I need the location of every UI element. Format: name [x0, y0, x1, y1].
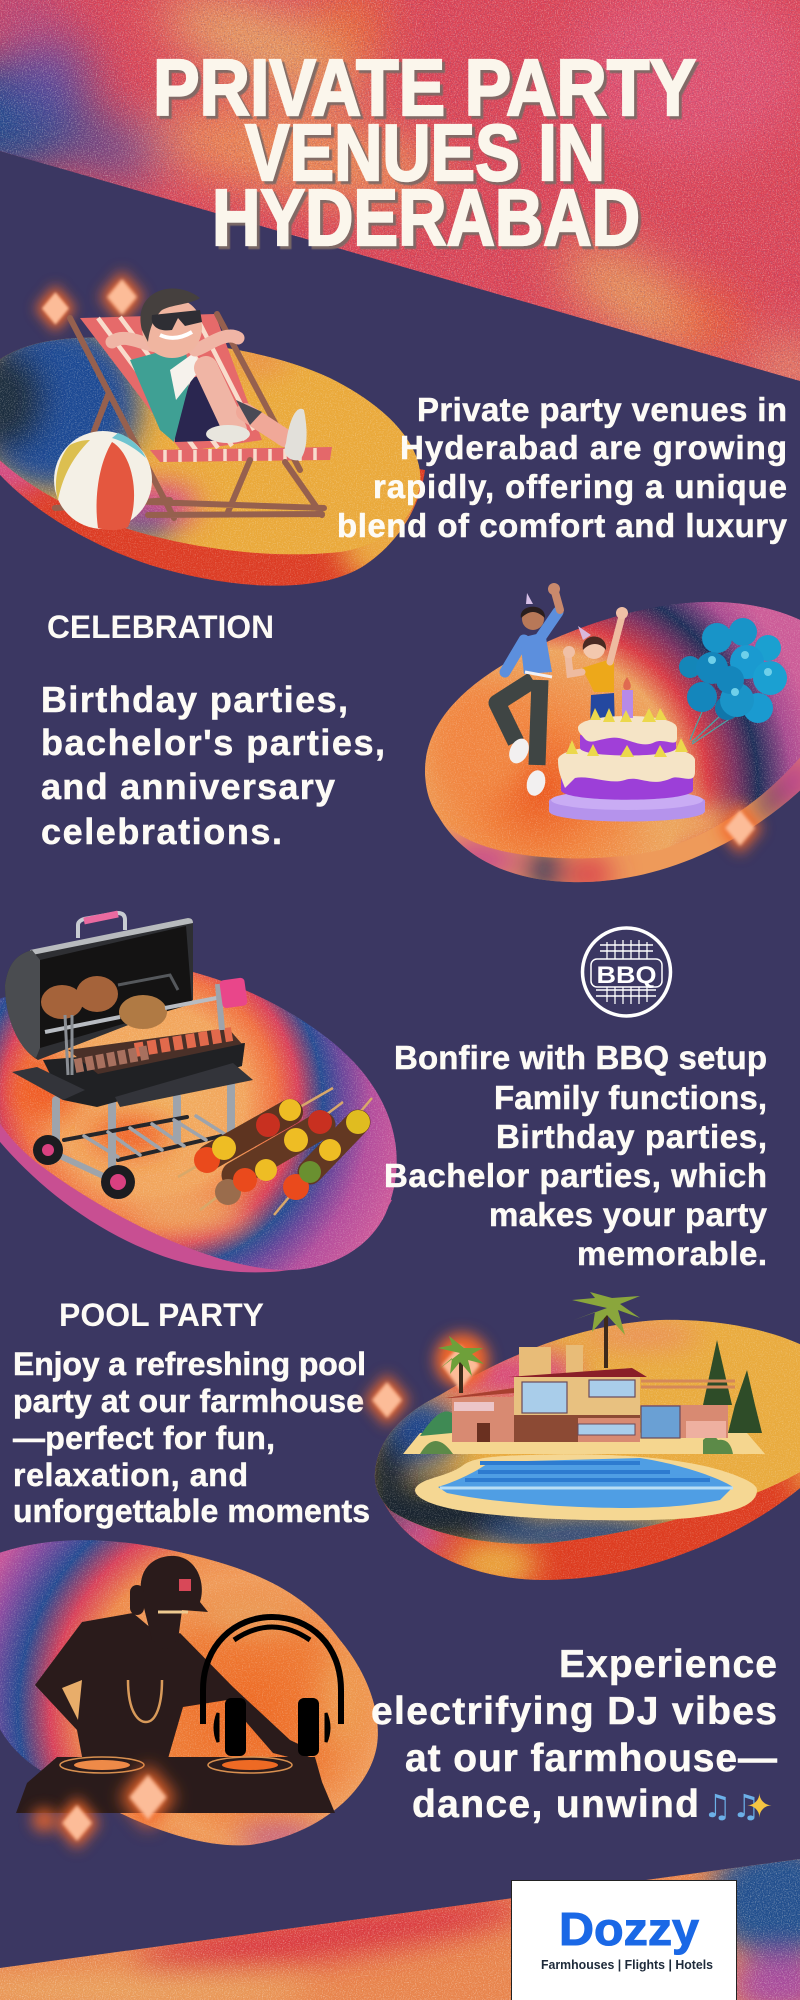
birthday cake	[549, 677, 705, 822]
glow diamonds	[32, 1765, 176, 1849]
rotisserie motor	[218, 977, 248, 1030]
pool party text: relaxation, and	[13, 1457, 248, 1493]
charcoal grill	[5, 913, 253, 1199]
grill handle	[78, 913, 125, 938]
trees	[703, 1340, 762, 1433]
deck chair	[55, 314, 332, 518]
intro text: Private party venues in	[417, 391, 787, 428]
intro text: Hyderabad are growing	[400, 429, 787, 466]
intro text	[337, 391, 788, 544]
title: HYDERABAD	[212, 173, 640, 262]
panel: bbq illustration	[0, 913, 420, 1280]
sand deck	[403, 1433, 765, 1454]
villa	[445, 1345, 735, 1442]
pool	[415, 1454, 757, 1520]
panel: cake illustration	[420, 583, 800, 895]
grill body	[12, 1028, 253, 1107]
icon: bbq badge	[582, 928, 670, 1016]
blob platform	[0, 950, 420, 1280]
title	[153, 43, 696, 262]
celebration text: Birthday parties,	[41, 679, 348, 720]
kebab skewers	[178, 1088, 372, 1215]
bbq text: Bonfire with BBQ setup	[394, 1039, 767, 1076]
glow diamonds	[36, 271, 144, 332]
dj silhouette	[35, 1556, 317, 1762]
glow diamonds	[365, 1333, 489, 1426]
dj text: at our farmhouse—	[405, 1737, 777, 1780]
panel: lounge chair illustration	[0, 271, 440, 600]
pool party text: unforgettable moments	[13, 1493, 370, 1529]
icon: headphones	[203, 1617, 341, 1756]
roast chickens	[41, 975, 232, 1075]
celebration text: bachelor's parties,	[41, 722, 385, 763]
bbq text: Family functions,	[494, 1079, 767, 1116]
icon: music notes and sparkles: ♫♫	[703, 1787, 760, 1825]
bbq text: makes your party	[489, 1196, 768, 1233]
blob platform	[0, 338, 425, 586]
dj text	[371, 1643, 777, 1826]
logo wordmark: Dozzy	[559, 1903, 699, 1955]
pool party text: party at our farmhouse	[13, 1383, 364, 1419]
glow diamond	[718, 802, 762, 854]
dj text: dance, unwind	[412, 1783, 699, 1826]
logo card	[512, 1880, 736, 2000]
heading: celebration: CELEBRATION	[47, 609, 274, 645]
woman dancing	[563, 607, 628, 730]
palm trees	[438, 1292, 640, 1393]
celebration text: celebrations.	[41, 811, 282, 852]
dj text: Experience	[559, 1643, 777, 1686]
celebration text	[41, 679, 385, 852]
logo tagline: Farmhouses | Flights | Hotels	[541, 1957, 713, 1972]
icon: music notes and sparkles: ✦	[746, 1787, 773, 1825]
blob platform	[0, 1540, 378, 1846]
title: PRIVATE PARTY	[153, 43, 696, 132]
top gradient band	[0, 0, 800, 400]
balloons	[679, 618, 787, 744]
bbq text: memorable.	[577, 1235, 767, 1272]
dj text: electrifying DJ vibes	[371, 1690, 777, 1733]
heading: pool party: POOL PARTY	[59, 1297, 264, 1333]
bbq text: Bachelor parties, which	[384, 1157, 767, 1194]
person relaxing	[112, 288, 307, 460]
title: VENUES IN	[245, 108, 605, 197]
grill lid	[5, 918, 193, 1060]
blob platform	[374, 1320, 800, 1580]
grill stand	[56, 1083, 231, 1188]
bushes	[420, 1411, 733, 1454]
icon: bbq badge: BBQ	[596, 962, 656, 989]
bottom gradient band	[0, 1859, 800, 2000]
wheels	[33, 1135, 135, 1199]
bbq text: Birthday parties,	[496, 1118, 767, 1155]
pool party text: Enjoy a refreshing pool	[13, 1346, 366, 1382]
panel: pool house illustration	[355, 1292, 800, 1591]
blob platform	[420, 595, 800, 895]
man dancing	[497, 583, 560, 798]
intro text: rapidly, offering a unique	[373, 468, 787, 505]
pool party text	[13, 1346, 370, 1529]
dj deck	[16, 1757, 335, 1813]
celebration text: and anniversary	[41, 766, 335, 807]
beach ball	[54, 431, 152, 530]
panel: dj illustration	[0, 1530, 390, 1860]
bbq text	[384, 1039, 768, 1272]
pool party text: —perfect for fun,	[13, 1420, 275, 1456]
intro text: blend of comfort and luxury	[337, 507, 788, 544]
